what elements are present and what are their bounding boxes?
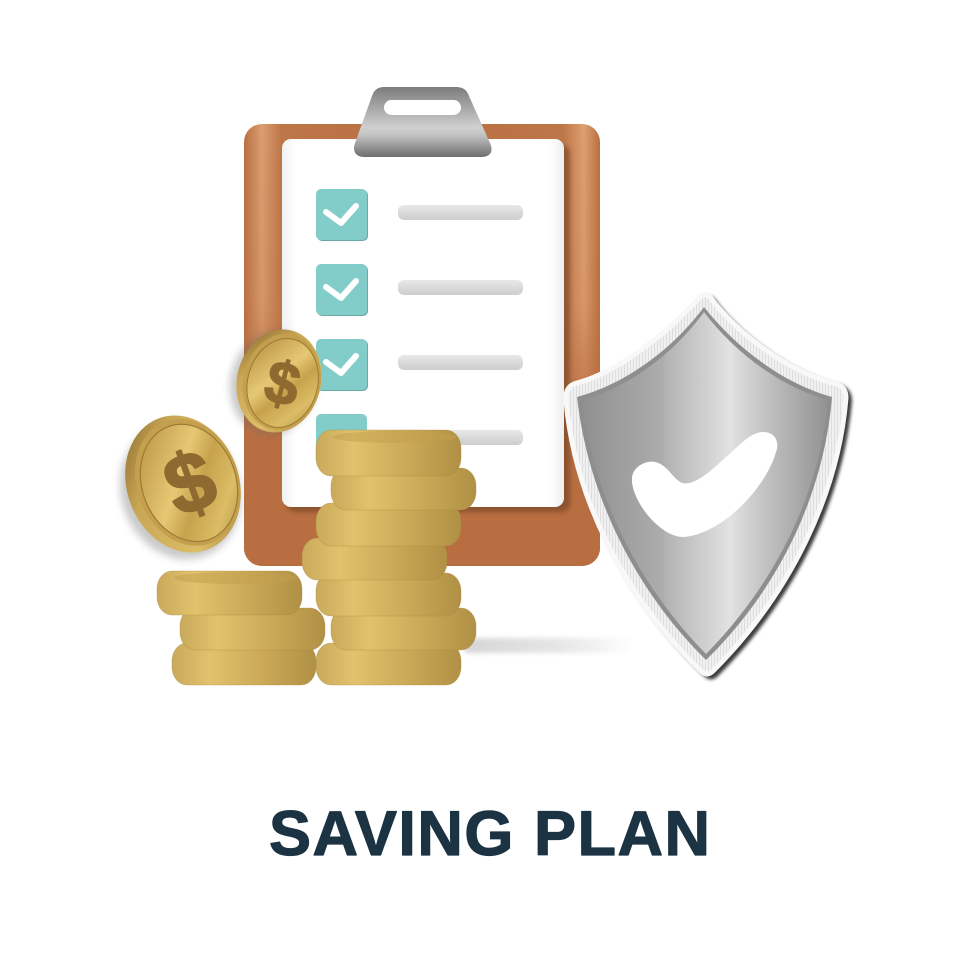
title: SAVING PLAN [269,799,710,869]
shield check mark [632,432,777,537]
floor shadow [465,638,635,653]
left coin stack [157,571,325,685]
clipboard board [244,124,600,566]
shield drop shadow [568,296,852,680]
checklist row 1 [316,189,523,241]
shield inner edge [577,307,832,660]
large floating coin [99,399,261,576]
checklist row 4 [316,414,523,465]
dollar sign: $ [152,430,228,535]
checklist row 3 [316,339,523,391]
paper sheet [282,139,570,512]
checklist row 2 [316,264,523,316]
metal clip [354,87,492,157]
shield outer rim [566,294,846,674]
right coin stack [302,430,476,685]
small floating coin [219,319,332,445]
dollar sign: $ [258,347,307,420]
clipboard [244,87,600,566]
shield face [582,312,828,654]
shield [566,294,852,680]
